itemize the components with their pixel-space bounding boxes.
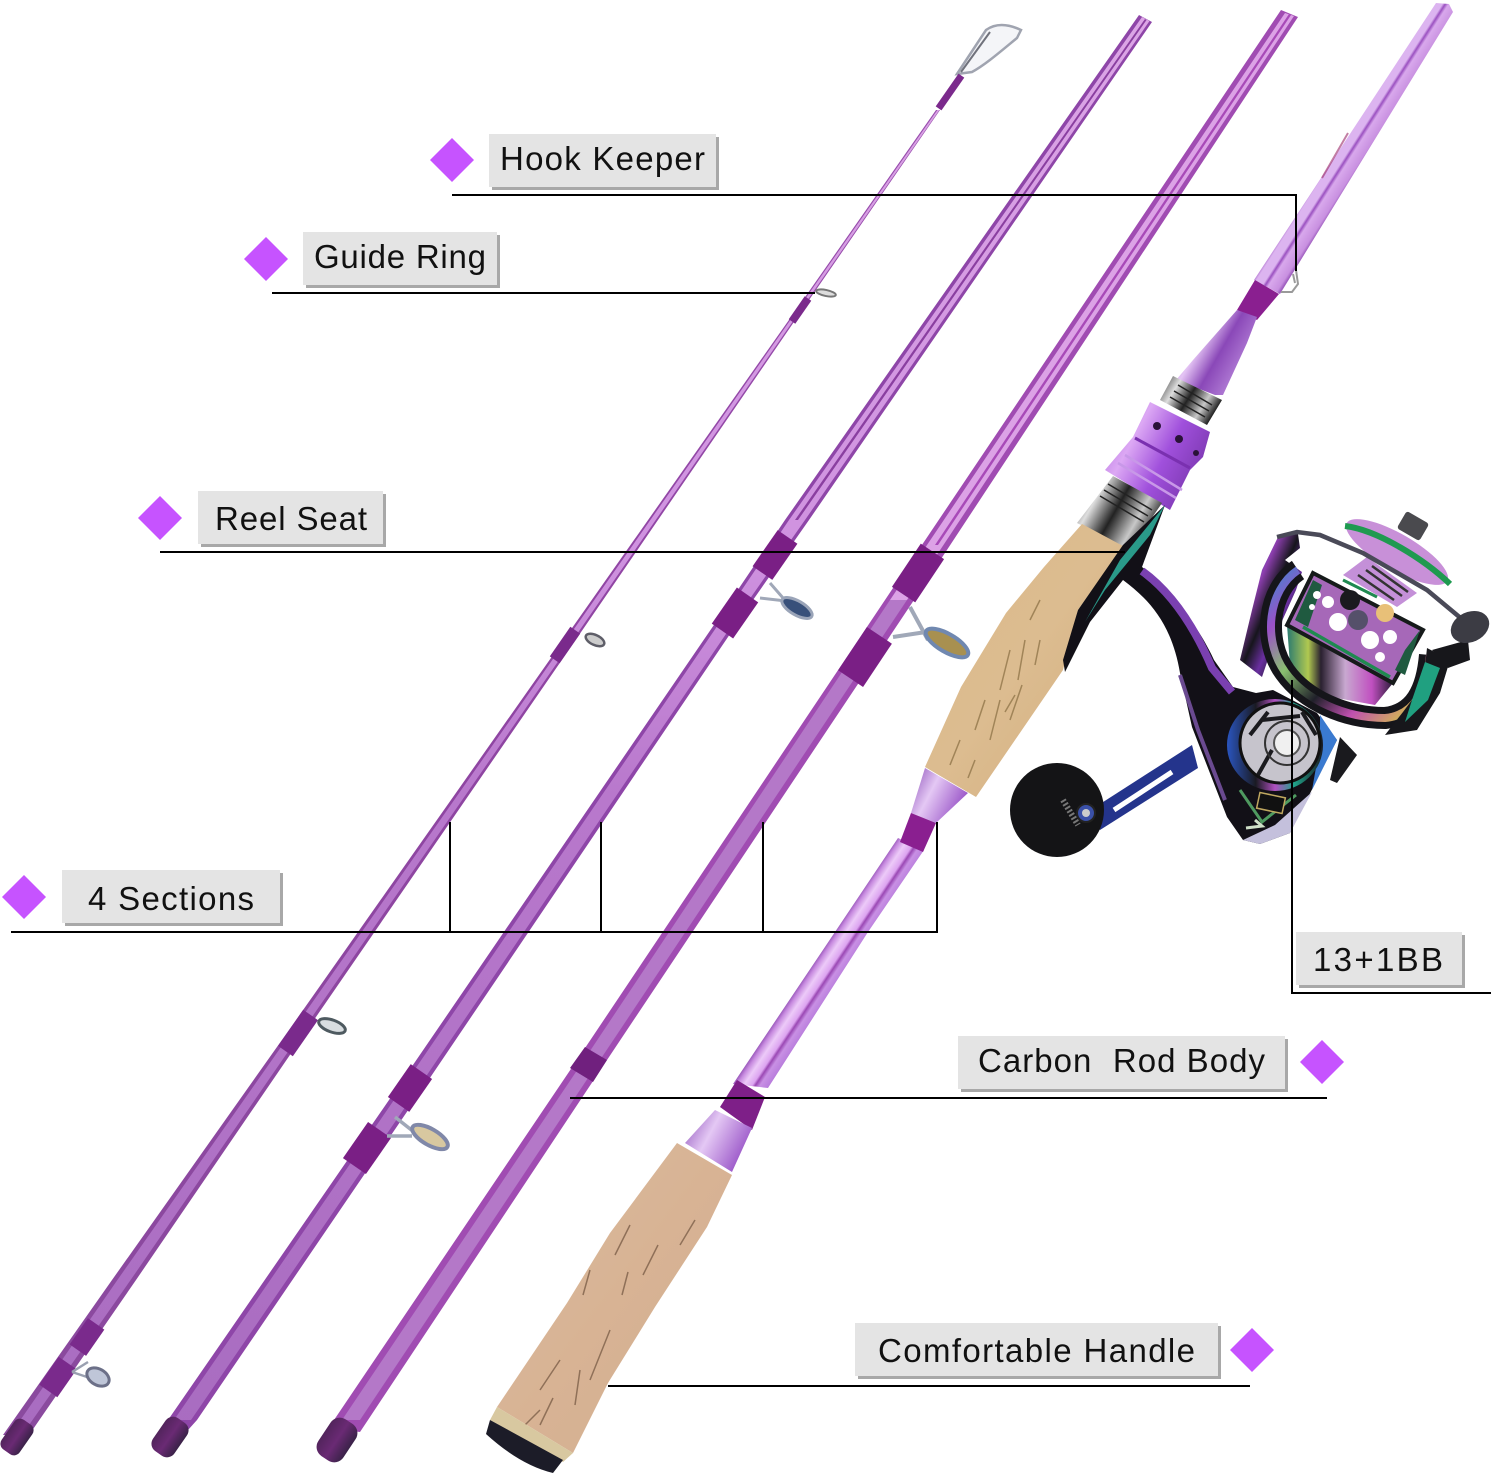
handle arm bbox=[1086, 745, 1198, 830]
lower winding bbox=[900, 813, 936, 852]
label box bbox=[958, 1036, 1288, 1092]
leader lines bbox=[11, 822, 937, 932]
marker diamond bbox=[2, 875, 46, 919]
guide ring, upper bbox=[789, 288, 836, 324]
threads lower bbox=[1077, 476, 1162, 550]
callout: Hook Keeper bbox=[430, 134, 1296, 271]
marker diamond bbox=[1230, 1328, 1274, 1372]
callout: Guide Ring bbox=[244, 232, 815, 293]
spinning reel bbox=[1010, 505, 1494, 857]
leader line bbox=[608, 1385, 1250, 1387]
label box bbox=[303, 232, 500, 288]
guide ring, lower bbox=[278, 1010, 347, 1056]
handle knob bbox=[1010, 763, 1104, 857]
threads upper bbox=[1160, 376, 1222, 425]
rod section 4: main handle section with reel seat bbox=[486, 3, 1453, 1473]
hook keeper bbox=[1281, 270, 1298, 292]
callout: Reel Seat bbox=[138, 491, 1125, 552]
rod section 1: thin tip section bbox=[0, 25, 1021, 1458]
lower rod body bbox=[733, 838, 924, 1088]
leader line bbox=[1292, 680, 1491, 993]
tip-top guide bbox=[936, 25, 1021, 110]
spool cage bbox=[1287, 573, 1423, 683]
label box: Guide Ring bbox=[314, 238, 486, 275]
label box: Hook Keeper bbox=[500, 140, 705, 177]
bail wire bbox=[1277, 532, 1463, 620]
lower cone bbox=[685, 1110, 752, 1172]
ferrule winding bbox=[720, 1080, 765, 1130]
anti-reverse lever bbox=[1330, 737, 1357, 783]
rotor ring and right cup bbox=[1271, 570, 1470, 735]
label box bbox=[489, 134, 719, 190]
marker diamond bbox=[138, 496, 182, 540]
lower body accents bbox=[1240, 715, 1337, 844]
guide ring, middle bbox=[550, 627, 606, 663]
lower cork grip bbox=[497, 1143, 732, 1453]
leader line bbox=[272, 292, 815, 294]
leader line bbox=[570, 1097, 1327, 1099]
label box bbox=[1296, 932, 1465, 988]
wrap, section 3 ferrule bbox=[570, 1047, 607, 1082]
line roller bbox=[1446, 605, 1494, 649]
tip section of handle rod bbox=[1254, 3, 1453, 294]
tapered hood bbox=[1176, 310, 1257, 395]
wraps and guide, section 2 lower bbox=[343, 1064, 451, 1174]
label box bbox=[855, 1323, 1221, 1379]
callout: 4 Sections bbox=[2, 822, 937, 932]
spool top with green ring bbox=[1338, 507, 1456, 597]
left bail arm bbox=[1240, 534, 1302, 677]
marker diamond bbox=[1300, 1040, 1344, 1084]
lower ferrule cone bbox=[911, 768, 968, 823]
guide ring, butt of section 1 bbox=[0, 1318, 112, 1458]
rod section 3 bbox=[312, 10, 1298, 1467]
spool shaft bbox=[1343, 557, 1417, 607]
leader line bbox=[160, 551, 1125, 553]
label box bbox=[198, 491, 386, 547]
label box: Comfortable Handle bbox=[878, 1332, 1195, 1369]
label box: 13+1BB bbox=[1313, 941, 1443, 978]
label box: Reel Seat bbox=[215, 500, 367, 537]
butt cap and gold band bbox=[486, 1407, 573, 1473]
label box bbox=[62, 870, 283, 926]
winding above reel seat bbox=[1237, 280, 1279, 320]
callout: Comfortable Handle bbox=[608, 1323, 1274, 1386]
locking collar bbox=[1105, 402, 1210, 510]
label box: Carbon Rod Body bbox=[978, 1042, 1266, 1079]
wraps and guide, section 3 upper bbox=[838, 544, 972, 687]
stem highlights bbox=[1085, 505, 1232, 800]
butt cap, section 3 bbox=[312, 1413, 362, 1467]
rod section 2 bbox=[148, 15, 1152, 1461]
marker diamond bbox=[430, 138, 474, 182]
upper cork grip bbox=[925, 524, 1123, 797]
callout: 13+1BB bbox=[1292, 680, 1491, 993]
butt cap, section 2 bbox=[148, 1413, 192, 1461]
wraps and guide, section 2 upper bbox=[712, 530, 815, 638]
marker diamond bbox=[244, 237, 288, 281]
callout: Carbon Rod Body bbox=[570, 1036, 1344, 1098]
label box: 4 Sections bbox=[88, 880, 254, 917]
reel foot and body bbox=[1063, 505, 1337, 844]
rotor disk bbox=[1227, 699, 1323, 791]
rotor interior bbox=[1287, 625, 1393, 705]
leader line bbox=[452, 195, 1296, 271]
